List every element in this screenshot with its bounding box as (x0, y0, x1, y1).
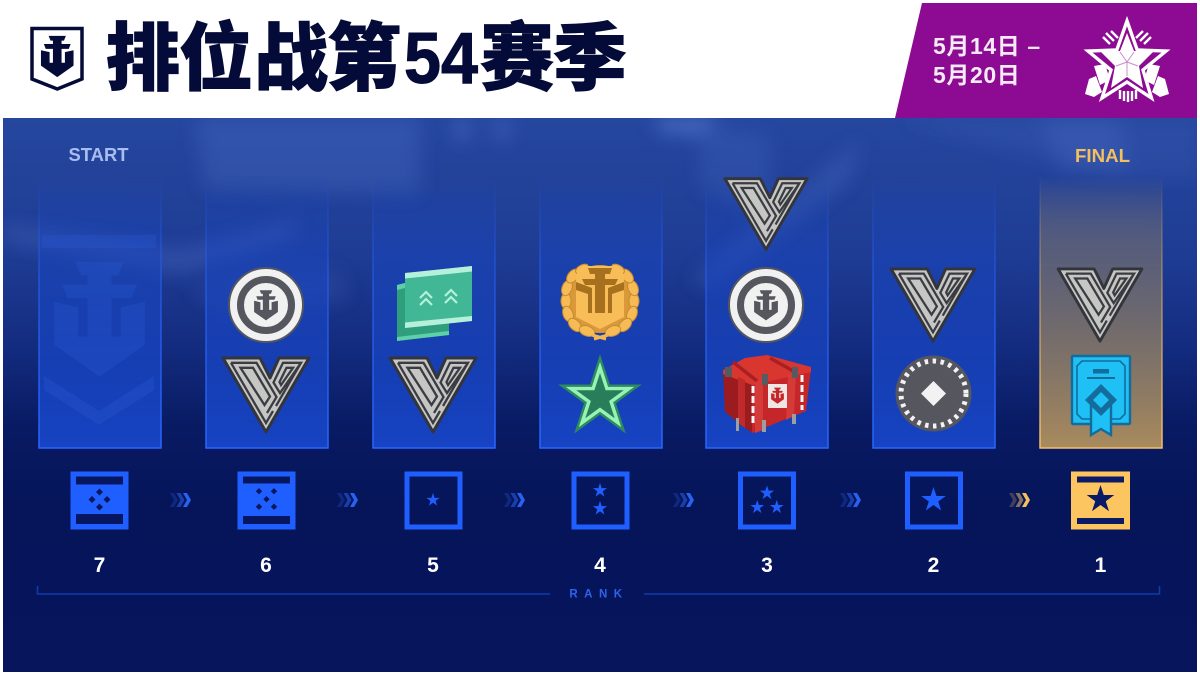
arrow 4 to 3 (673, 493, 694, 507)
rank icon 2 (908, 474, 960, 527)
arrow 6 to 5 (337, 493, 358, 507)
date text: 5月20日 (933, 62, 1020, 88)
rank icon 7 (70, 472, 128, 530)
icon: signal seal (896, 356, 972, 432)
rank icon 3 (740, 474, 794, 527)
title suffix: 赛季 (480, 0, 627, 106)
rank numbers: 5 (427, 554, 439, 577)
ghost emblem (42, 235, 156, 425)
rank numbers: 7 (94, 554, 105, 577)
panel: rank 3 (706, 176, 828, 448)
icon: anchor coin rank 3 (729, 268, 803, 342)
rank bracket (38, 586, 1160, 600)
panel: rank 1 final (1040, 176, 1162, 448)
icon: anchor coin rank 6 (229, 268, 303, 342)
panel: start rank 7 (39, 176, 161, 448)
panel: rank 5 (373, 176, 495, 448)
icon: V badge rank 6 (223, 358, 309, 432)
icon: V badge rank 5 (390, 358, 476, 432)
header bar (0, 0, 1200, 118)
date banner (895, 3, 1197, 118)
icon: V badge rank 2 (891, 269, 975, 341)
date text: 5月14日 – (933, 33, 1041, 59)
icon: green star (562, 358, 638, 430)
arrow 2 to 1 (1009, 493, 1030, 507)
icon: V badge rank 1 (1058, 269, 1142, 341)
arrow 7 to 6 (170, 493, 191, 507)
icon: season star emblem (1085, 21, 1169, 102)
arrow 3 to 2 (840, 493, 861, 507)
rank numbers: 2 (928, 554, 939, 577)
icon: gold laurel emblem (560, 262, 640, 339)
label: START: START (68, 145, 128, 165)
rank numbers: 4 (594, 554, 606, 577)
rank icon 4 (574, 474, 627, 527)
rank icon 1 (1071, 472, 1130, 530)
panel: rank 6 (206, 176, 328, 448)
panel: rank 4 (540, 176, 662, 448)
icon: blue certificate (1072, 356, 1130, 435)
icon: V badge top rank 3 (725, 179, 807, 249)
rank numbers: 6 (260, 554, 272, 577)
rank numbers: 3 (761, 554, 773, 577)
title: 排位战第 (106, 0, 401, 106)
icon: green signal flags (397, 266, 472, 341)
rank numbers (94, 554, 1107, 577)
rank icon 5 (407, 474, 460, 527)
logo: shield with anchor (32, 28, 82, 89)
panel: rank 2 (873, 176, 995, 448)
arrow 5 to 4 (504, 493, 525, 507)
icon: red crate (723, 355, 811, 433)
rank icon 6 (238, 472, 296, 530)
title season number: 54 (404, 19, 478, 99)
rank label: RANK (569, 588, 629, 600)
label: FINAL: FINAL (1075, 146, 1130, 166)
rank numbers: 1 (1095, 554, 1107, 577)
